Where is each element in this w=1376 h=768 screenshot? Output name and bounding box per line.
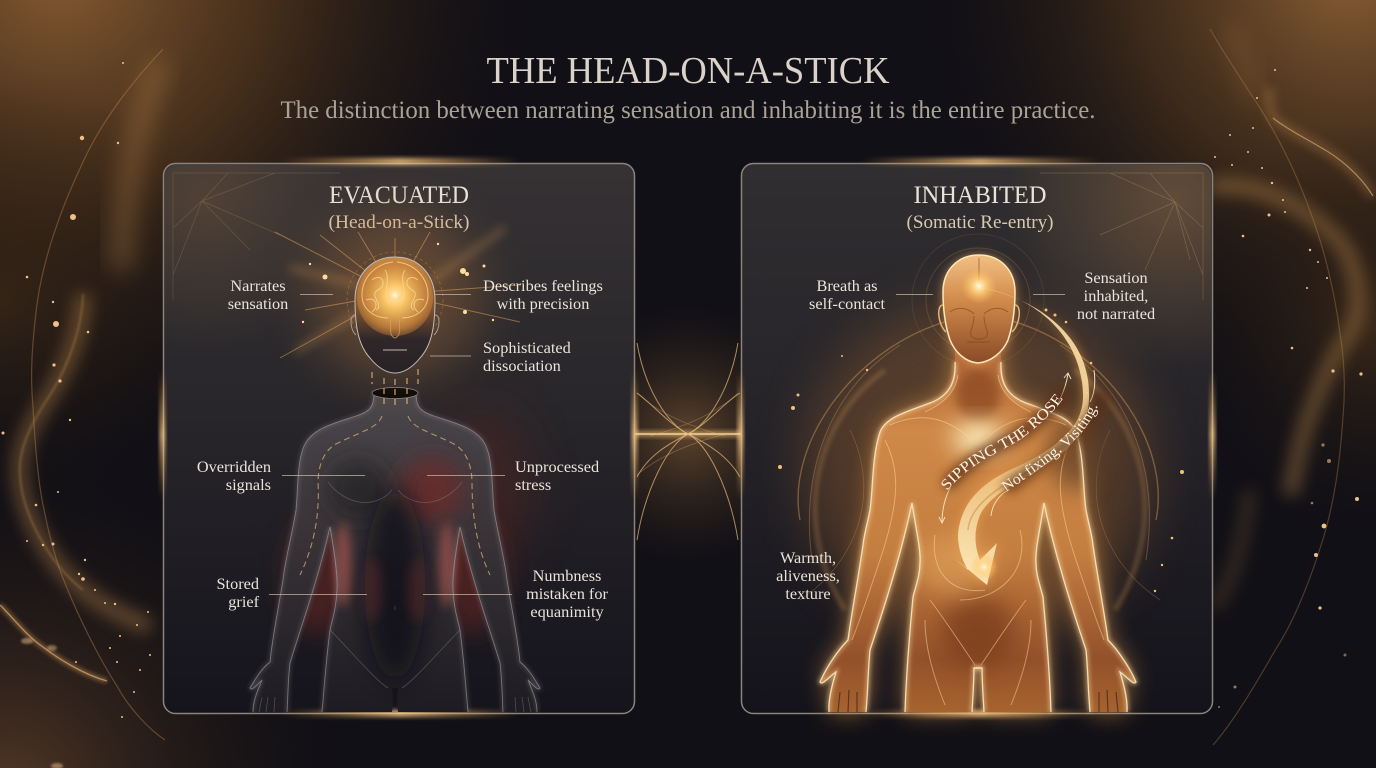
rays from overactive head [275,209,520,379]
warm aura and orbit arcs [798,234,1160,640]
label: Sophisticated dissociation [430,338,571,375]
curved label: Sipping the Rose: SIPPING THE ROSE [942,394,1063,490]
label: Narrates sensation [228,276,333,313]
label: Describes feelings with precision [435,276,603,313]
sparkle dots [778,308,1184,592]
panel: inhabited [736,154,1218,730]
panel corner glow and geometry [165,165,465,405]
subtitle: The distinction between narrating sensation and inhabiting it is the entire practice. [280,97,1096,124]
label: Describes feelings with precision: Describes feelings [483,276,603,295]
label: Sensation inhabited, not narrated: Sensation [1084,268,1148,287]
label: Numbness mistaken for equanimity: mistaken for [526,584,608,603]
panel frame [742,164,1212,714]
label: Stored grief: Stored [216,574,259,593]
dashed signal lines [300,369,490,575]
label: Stored grief [216,574,367,611]
label: Overridden signals: signals [226,475,271,494]
figure: inhabited glowing body [820,340,1136,712]
label: Numbness mistaken for equanimity: Numbness [533,566,601,585]
head with calm inner light [939,255,1019,365]
label: Unprocessed stress: Unprocessed [515,457,599,476]
sparkle dots [302,243,494,323]
label: Overridden signals [197,457,365,494]
label: Breath as self-contact [809,276,933,313]
label: Unprocessed stress: stress [515,475,551,494]
figure: disconnected body [250,391,540,712]
dark smear behind curved text [950,396,1102,486]
label: Describes feelings with precision: with precision [497,294,589,313]
panel corner glow and geometry [930,165,1211,425]
label: Sensation inhabited, not narrated: not narrated [1077,304,1155,323]
panel edge glow [738,158,1215,717]
label: Stored grief: grief [228,592,260,611]
title: THE HEAD-ON-A-STICK [486,50,890,92]
open neck stump [372,388,418,398]
label: Sophisticated dissociation: dissociation [483,356,561,375]
label: Narrates sensation: sensation [228,294,288,313]
label: Warmth, aliveness, texture [776,548,840,603]
arrow: sipping the rose flow [953,288,1089,585]
small arrows along the flow [939,370,1095,523]
label: Numbness mistaken for equanimity [423,566,608,621]
label: Narrates sensation: Narrates [230,276,286,295]
panel subheading: (Head-on-a-Stick) [328,212,470,233]
label: Sensation inhabited, not narrated [1033,268,1155,323]
curved label: Not fixing. Visiting.: Not fixing. Visiting. [1000,406,1098,492]
label: Warmth, aliveness, texture: Warmth, [780,548,836,567]
label: Unprocessed stress [427,457,599,494]
label: Sophisticated dissociation: Sophisticated [483,338,571,357]
panel heading: INHABITED [914,182,1046,209]
label: Breath as self-contact: self-contact [809,294,885,313]
red stress glow behind body [286,410,530,635]
label: Warmth, aliveness, texture: texture [785,584,831,603]
panel heading: EVACUATED [329,182,469,209]
head with lit brain [351,257,439,373]
label: Sensation inhabited, not narrated: inhabited, [1084,286,1148,305]
connector between panels [635,343,741,540]
label: Numbness mistaken for equanimity: equanimity [530,602,604,621]
label: Warmth, aliveness, texture: aliveness, [776,566,840,585]
panel edge glow [160,158,637,717]
panel subheading: (Somatic Re-entry) [906,212,1054,233]
panel: evacuated [160,158,637,717]
label: Breath as self-contact: Breath as [816,276,878,295]
label: Overridden signals: Overridden [197,457,271,476]
panel frame [164,164,634,714]
golden energy swirls, left [0,49,165,740]
golden energy swirls, right [1210,25,1373,745]
